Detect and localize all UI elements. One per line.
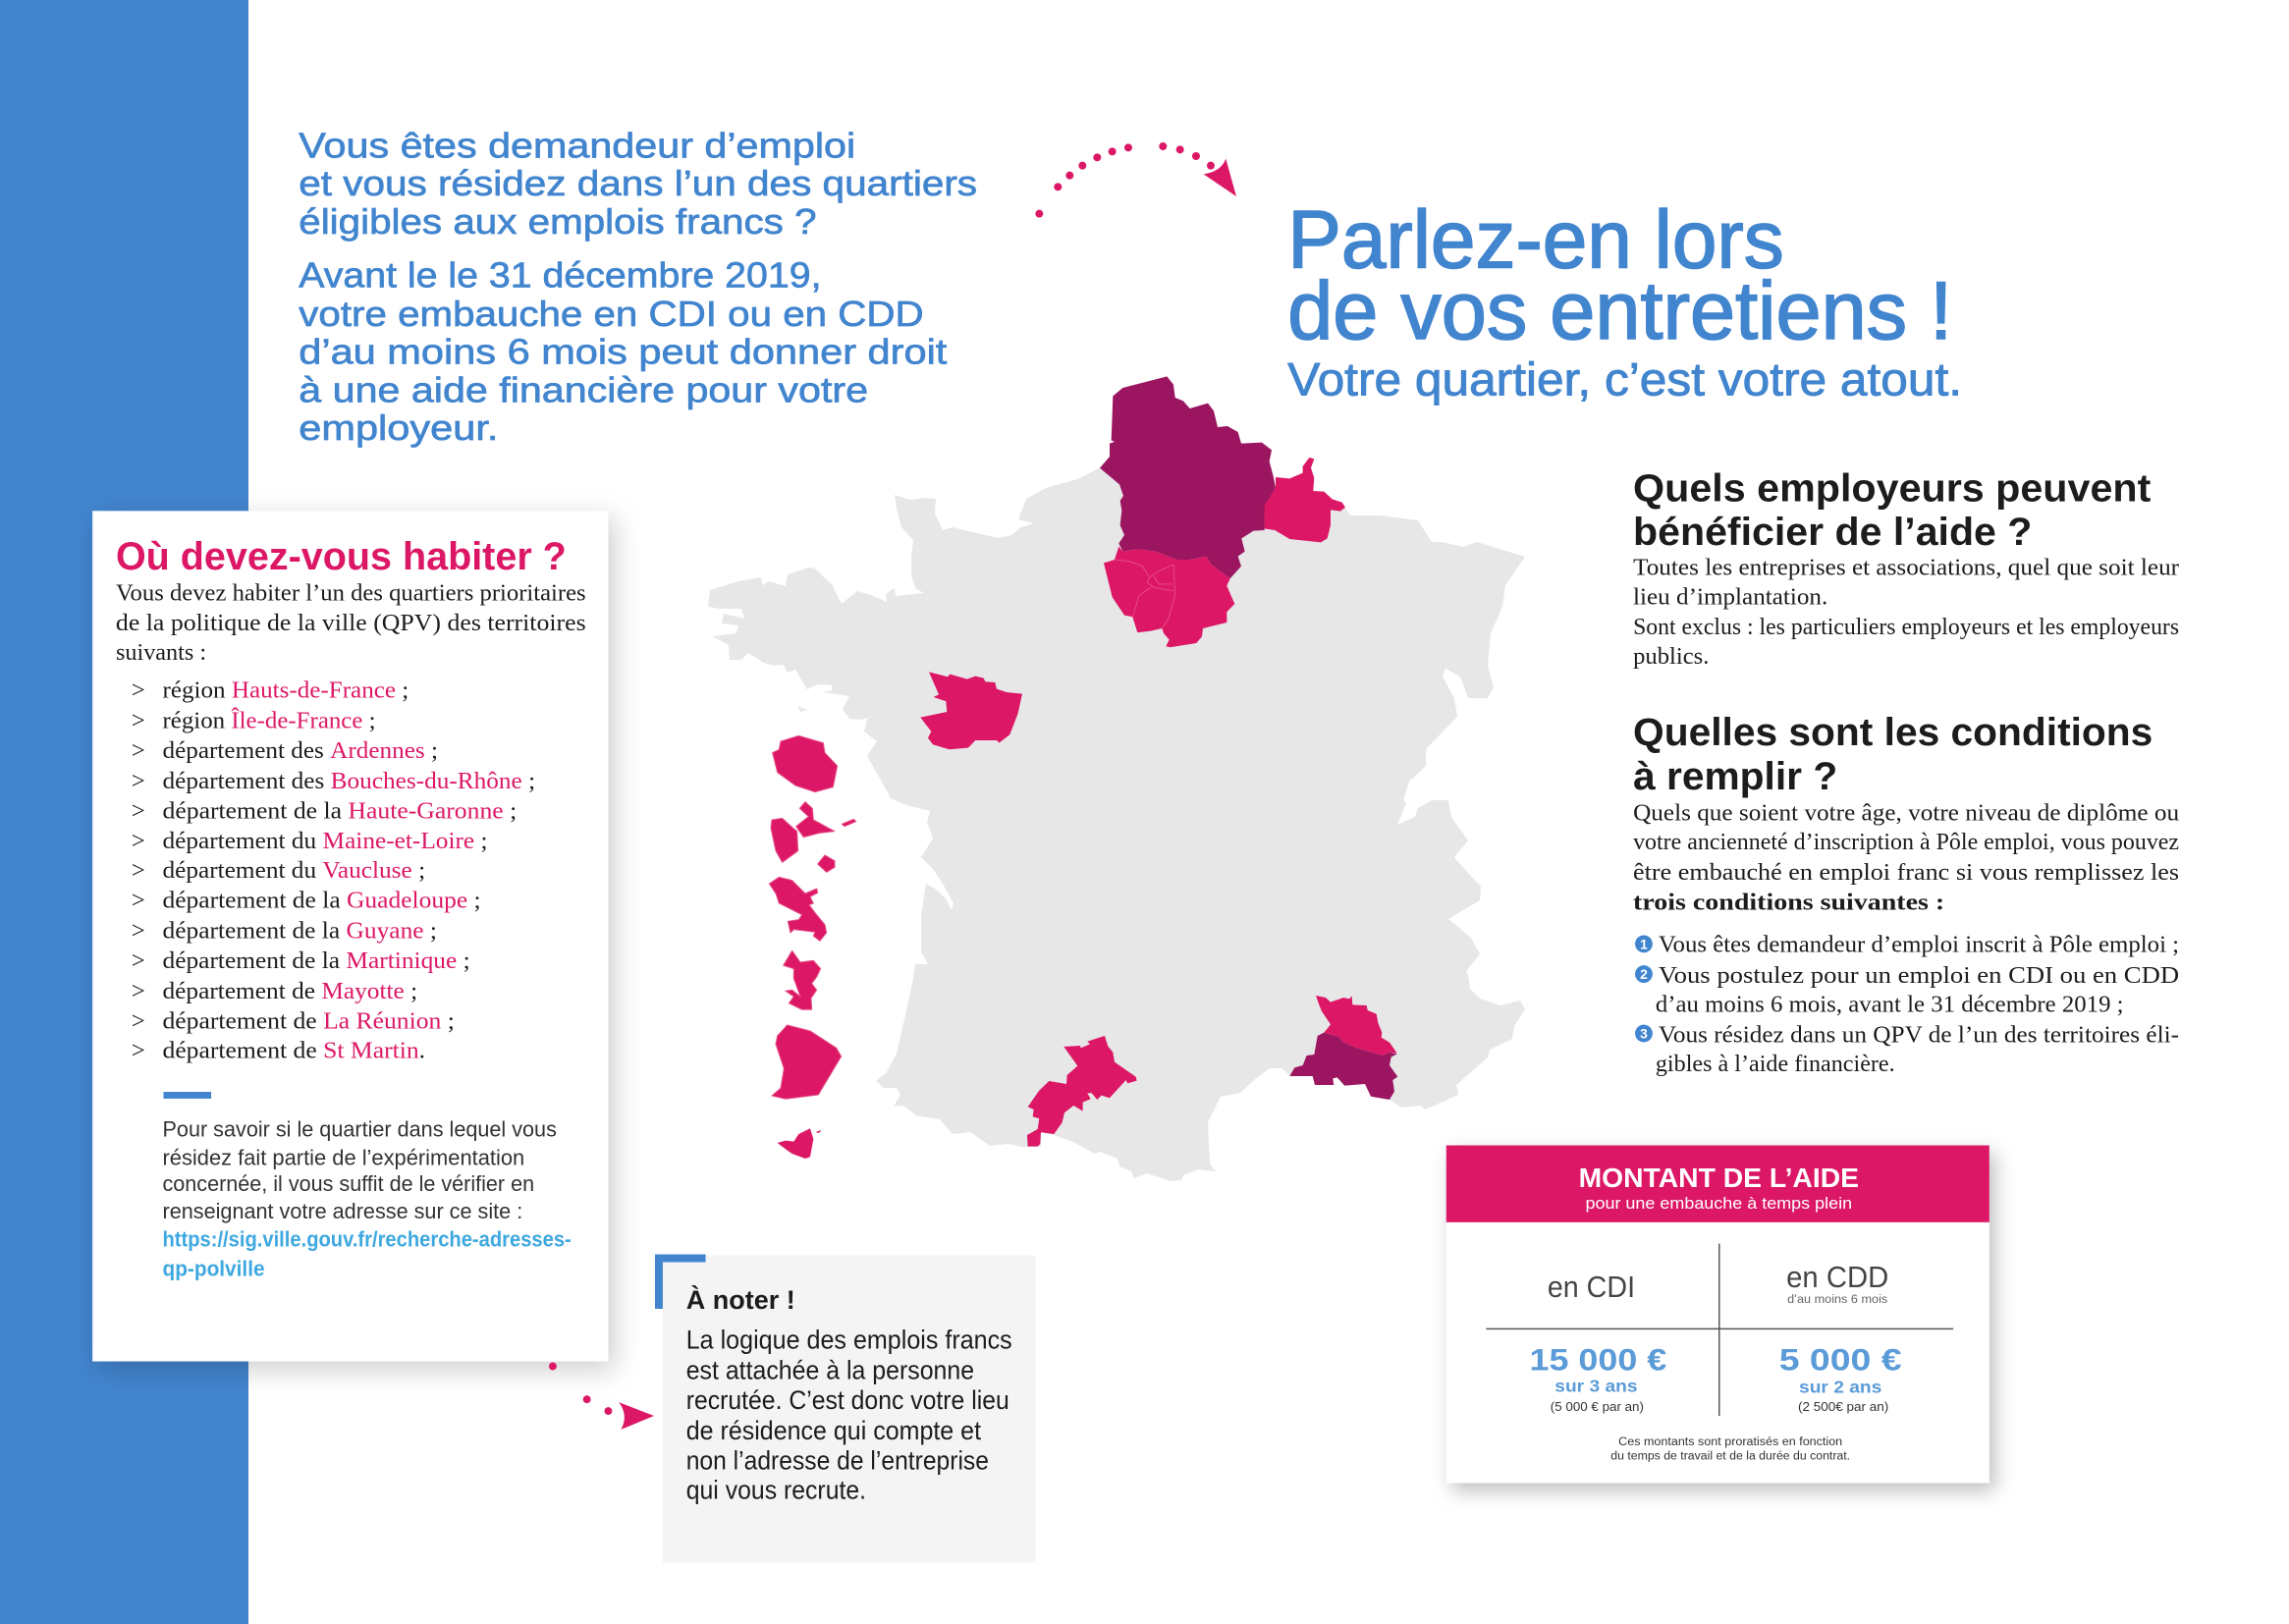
note text: est attachée à la personne	[686, 1355, 974, 1384]
region: Vaucluse	[1316, 996, 1397, 1056]
panel: à noter	[655, 1255, 1036, 1563]
title	[1287, 194, 1962, 406]
verification note with link: résidez fait partie de l’expérimentation	[163, 1145, 524, 1169]
region: Hauts-de-France	[1100, 376, 1276, 578]
panel: montant de l'aide	[1446, 1146, 1989, 1483]
column: CDD	[1779, 1260, 1902, 1414]
title: Votre quartier, c’est votre atout.	[1287, 353, 1962, 406]
note text: non l’adresse de l’entreprise	[686, 1446, 989, 1476]
numbered condition 3: 3	[1640, 1026, 1648, 1042]
list of territories: région Île-de-France ;	[163, 706, 376, 733]
list of territories	[132, 677, 535, 1063]
intro text block: à une aide financière pour votre	[299, 370, 868, 409]
note text	[686, 1326, 1012, 1504]
verification note with link: Pour savoir si le quartier dans lequel vous	[163, 1117, 557, 1142]
intro text block: éligibles aux emplois francs ?	[299, 202, 817, 242]
island: La Reunion	[773, 735, 838, 792]
intro text block: et vous résidez dans l’un des quartiers	[299, 164, 977, 203]
territory: Guyane	[772, 1025, 842, 1099]
text block: employers: Sont exclus : les particuliers employeurs et les employeurs	[1633, 614, 2179, 640]
left blue band	[0, 0, 248, 1624]
text block: employers: lieu d’implantation.	[1633, 583, 1827, 610]
list of territories: >	[132, 917, 145, 944]
intro text block: votre embauche en CDI ou en CDD	[299, 295, 924, 334]
list of territories: département des Ardennes ;	[163, 737, 438, 764]
text block: employers: bénéficier de l’aide ?	[1633, 511, 2032, 554]
verification note with link: qp-polville	[163, 1256, 265, 1280]
text block: employers: Toutes les entreprises et associations, quel que soit leur	[1633, 555, 2180, 581]
list of territories: département de la Martinique ;	[163, 947, 470, 974]
column: CDD: d’au moins 6 mois	[1787, 1292, 1887, 1306]
verification note with link: https://sig.ville.gouv.fr/recherche-adresses-	[163, 1227, 572, 1252]
panel intro text: de la politique de la ville (QPV) des territoires	[116, 610, 586, 636]
list of territories: département de La Réunion ;	[163, 1008, 455, 1035]
region: Haute-Garonne	[1027, 1036, 1137, 1147]
numbered condition 1: 1	[1640, 936, 1648, 951]
verification note with link: concernée, il vous suffit de le vérifier en	[163, 1171, 534, 1196]
column: CDI: en CDI	[1548, 1270, 1635, 1304]
numbered condition 3	[1635, 1021, 2179, 1077]
footnote: Ces montants sont proratisés en fonction	[1618, 1435, 1842, 1448]
title: de vos entretiens !	[1287, 265, 1952, 356]
list of territories: >	[132, 828, 145, 854]
intro text block: Vous êtes demandeur d’emploi	[299, 127, 855, 166]
list of territories: >	[132, 707, 145, 733]
column: CDI	[1530, 1270, 1667, 1414]
region: Ardennes	[1265, 458, 1345, 542]
overseas territories	[769, 735, 856, 1159]
region: Ile-de-France	[1104, 547, 1234, 647]
note heading: À noter !	[686, 1284, 795, 1315]
numbered condition 2: d’au moins 6 mois, avant le 31 décembre 2019 ;	[1656, 992, 2124, 1018]
island: Mayotte	[784, 950, 821, 1009]
column: CDD: en CDD	[1786, 1260, 1888, 1294]
note text: recrutée. C’est donc votre lieu	[686, 1385, 1009, 1415]
note text: La logique des emplois francs	[686, 1326, 1012, 1355]
list of territories: département de la Haute-Garonne ;	[163, 798, 517, 825]
numbered condition 2: Vous postulez pour un emploi en CDI ou en CDD	[1659, 962, 2179, 989]
list of territories: >	[132, 768, 145, 794]
region: Maine-et-Loire	[920, 672, 1022, 749]
numbered condition 2	[1635, 962, 2179, 1018]
list of territories: département du Maine-et-Loire ;	[163, 828, 488, 854]
footnote: du temps de travail et de la durée du contrat.	[1610, 1449, 1850, 1463]
intro text block	[299, 127, 977, 448]
text block: conditions: Quelles sont les conditions	[1633, 711, 2153, 754]
column: CDI: (5 000 € par an)	[1551, 1399, 1644, 1414]
column: CDD: sur 2 ans	[1799, 1377, 1881, 1396]
panel intro text: Vous devez habiter l’un des quartiers prioritaires	[116, 580, 586, 607]
panel header	[1446, 1146, 1989, 1222]
column: CDI: 15 000 €	[1530, 1341, 1667, 1377]
list of territories: >	[132, 677, 145, 704]
arrow: dotted curve to title	[1035, 142, 1236, 218]
numbered condition 3: Vous résidez dans un QPV de l’un des territoires éli-	[1659, 1021, 2179, 1048]
note text: qui vous recrute.	[686, 1475, 866, 1504]
list of territories: >	[132, 947, 145, 974]
arrow: dots to note box	[549, 1363, 654, 1430]
island: Martinique	[769, 877, 827, 941]
list of territories: département de St Martin.	[163, 1037, 425, 1063]
verification note with link: renseignant votre adresse sur ce site :	[163, 1199, 522, 1223]
list of territories: >	[132, 857, 145, 884]
text block: employers: Quels employeurs peuvent	[1633, 466, 2151, 510]
island: St Martin	[778, 1128, 821, 1159]
panel header: MONTANT DE L’AIDE	[1579, 1163, 1859, 1193]
list of territories: >	[132, 1037, 145, 1063]
column: CDD: 5 000 €	[1779, 1341, 1902, 1377]
text block: conditions: trois conditions suivantes :	[1633, 890, 1944, 916]
text block: employers	[1633, 466, 2180, 670]
island: Guadeloupe	[771, 802, 856, 872]
panel intro text: suivants :	[116, 639, 206, 666]
list of territories: département de la Guyane ;	[163, 917, 437, 944]
intro text block: Avant le le 31 décembre 2019,	[299, 255, 821, 295]
map of France	[708, 376, 1525, 1181]
numbered condition 3: gibles à l’aide financière.	[1656, 1051, 1895, 1077]
text block: conditions	[1633, 711, 2179, 1077]
text block: conditions: votre ancienneté d’inscription à Pôle emploi, vous pouvez	[1633, 829, 2179, 855]
text block: conditions: à remplir ?	[1633, 755, 1837, 798]
panel header: pour une embauche à temps plein	[1586, 1194, 1852, 1213]
column: CDD: (2 500€ par an)	[1798, 1399, 1888, 1414]
column: CDI: sur 3 ans	[1554, 1376, 1638, 1395]
list of territories: >	[132, 737, 145, 764]
note text: de résidence qui compte et	[686, 1416, 982, 1445]
list of territories: département du Vaucluse ;	[163, 857, 425, 884]
footnote	[1610, 1435, 1850, 1463]
list of territories: >	[132, 798, 145, 825]
list of territories: département de Mayotte ;	[163, 978, 417, 1004]
list of territories: >	[132, 978, 145, 1004]
text block: employers: publics.	[1633, 643, 1709, 670]
intro text block: employeur.	[299, 408, 498, 448]
verification note with link	[163, 1117, 572, 1280]
panel intro text	[116, 580, 586, 666]
list of territories: région Hauts-de-France ;	[163, 677, 409, 704]
panel heading: Où devez-vous habiter ?	[116, 535, 567, 578]
text block: conditions: Quels que soient votre âge, votre niveau de diplôme ou	[1633, 799, 2179, 826]
list of territories: département de la Guadeloupe ;	[163, 888, 481, 914]
region: Bouches-du-Rhone	[1289, 1033, 1397, 1100]
text block: conditions: être embauché en emploi franc si vous remplissez les	[1633, 859, 2179, 886]
list of territories: département des Bouches-du-Rhône ;	[163, 768, 535, 794]
title: Parlez-en lors	[1287, 194, 1784, 286]
intro text block: d’au moins 6 mois peut donner droit	[299, 333, 947, 372]
map: metropolitan France outline	[708, 467, 1525, 1181]
list of territories: >	[132, 888, 145, 914]
numbered condition 2: 2	[1640, 966, 1648, 982]
numbered condition 1: Vous êtes demandeur d’emploi inscrit à Pôle emploi ;	[1659, 931, 2179, 957]
list of territories: >	[132, 1008, 145, 1035]
panel: où devez-vous habiter	[92, 511, 608, 1362]
